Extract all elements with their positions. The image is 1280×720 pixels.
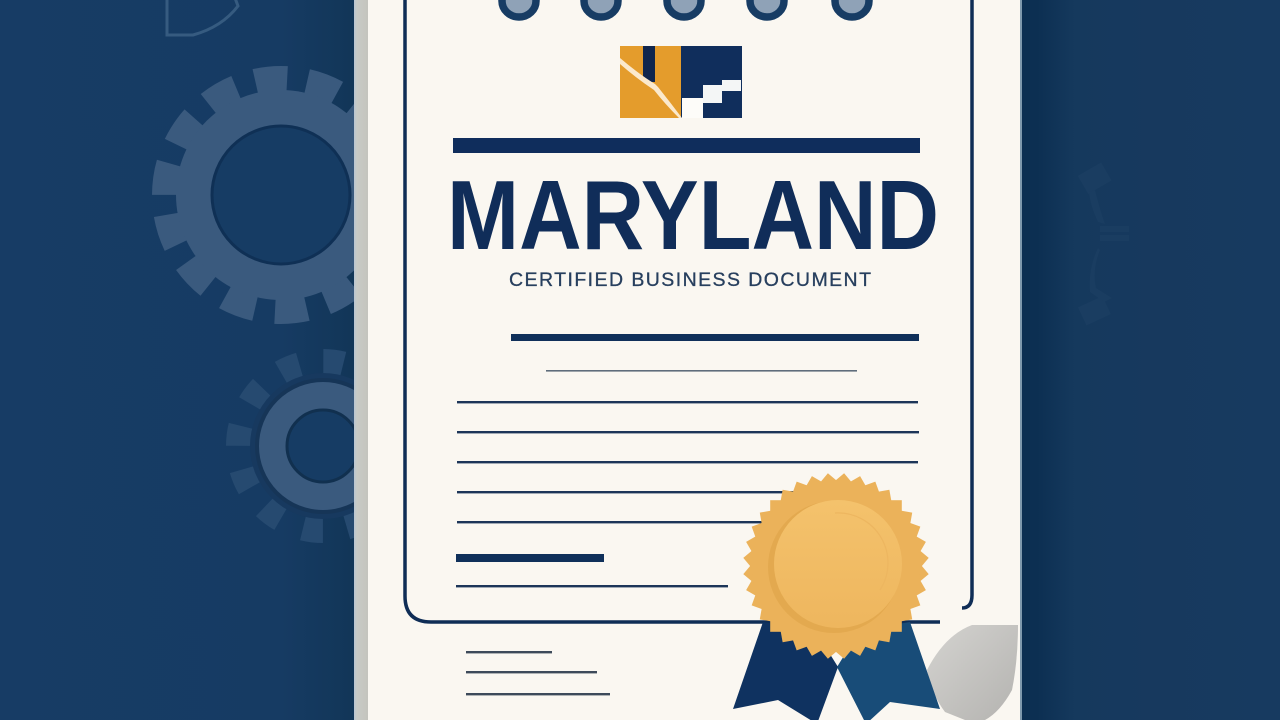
document frame — [405, 0, 972, 622]
panel: document sheet — [354, 0, 1022, 720]
footer lines — [466, 651, 610, 695]
subtitle: CERTIFIED BUSINESS DOCUMENT — [509, 269, 871, 291]
title: MARYLAND — [447, 160, 939, 270]
page curl — [927, 625, 1018, 720]
icon: faint gear, right — [1078, 162, 1129, 326]
seal with ribbon — [733, 473, 940, 720]
logo: Maryland flag emblem — [620, 46, 742, 118]
text lines — [456, 370, 919, 587]
icon: shield outline, top left — [167, 0, 238, 35]
icon: small gear — [226, 349, 354, 543]
top rule — [453, 138, 920, 153]
binding rings — [502, 0, 869, 17]
ribbon right — [837, 622, 940, 720]
medallion — [743, 473, 929, 659]
heading rule — [511, 334, 919, 341]
ribbon left — [733, 622, 838, 720]
icon: large gear — [165, 79, 397, 311]
